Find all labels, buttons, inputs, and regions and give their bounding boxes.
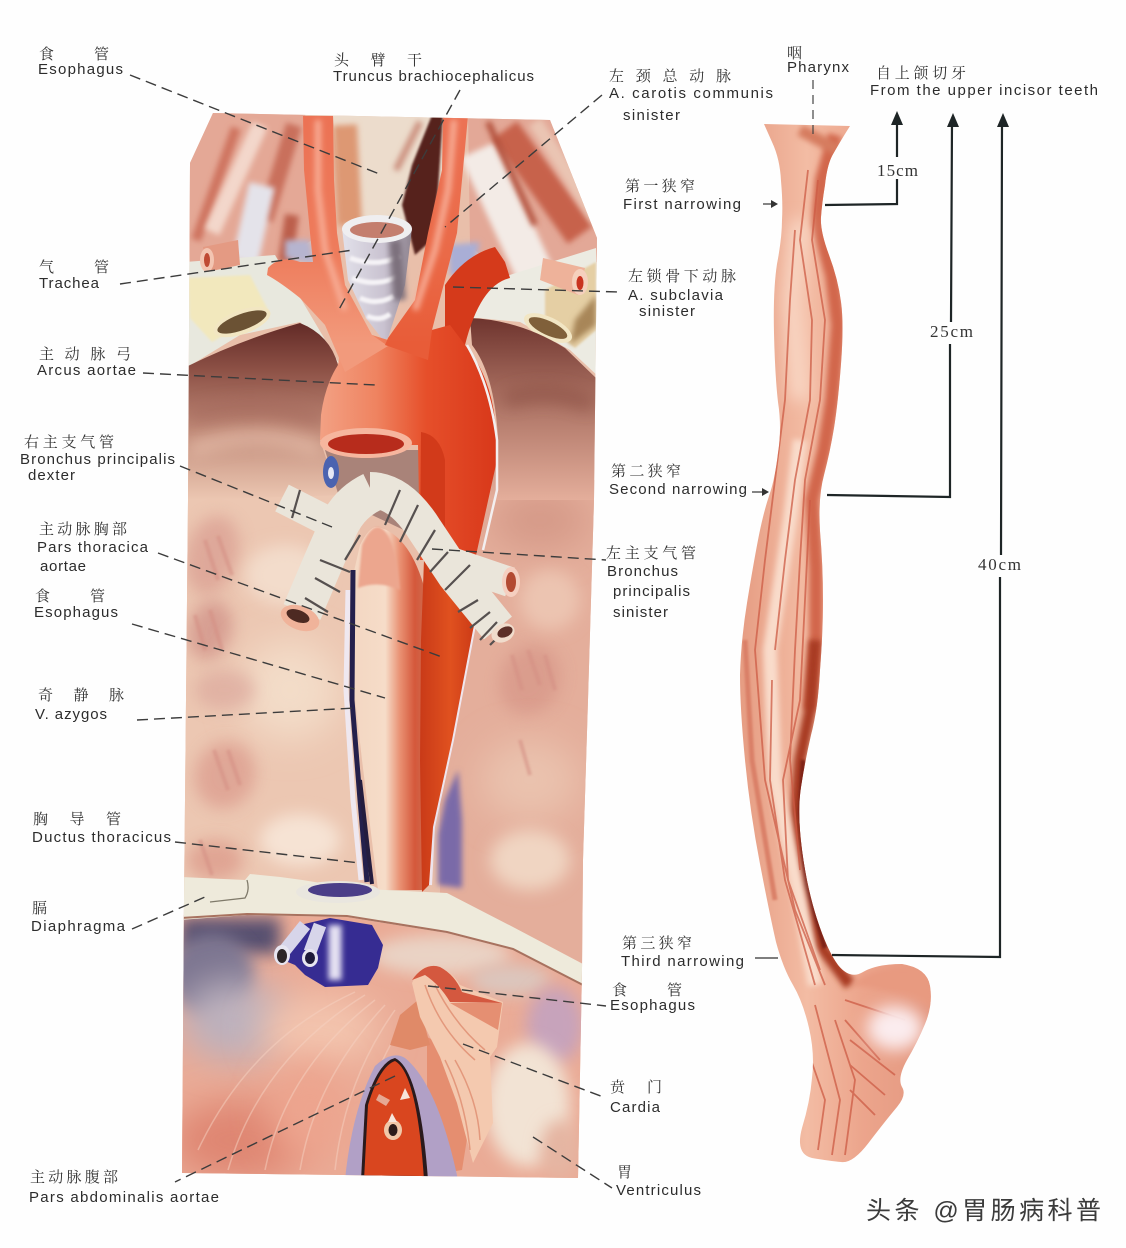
label: Cardia: Cardia (610, 1099, 661, 1116)
label: Pars thoracica aortae: 主动脉胸部 (39, 518, 127, 539)
label: Trachea (39, 256, 109, 292)
label: Ventriculus: 胃 (617, 1161, 632, 1182)
purple recess (438, 770, 462, 888)
label: A. subclavia sinister: A. subclavia (628, 287, 724, 304)
left bronchus lower end (492, 623, 514, 643)
label: Bronchus principalis sinister: sinister (613, 604, 668, 621)
clavicle stumps (188, 262, 596, 349)
lower abdomen base (170, 915, 585, 1185)
lung fields (186, 318, 596, 500)
label: V. azygos (35, 684, 124, 723)
label: Bronchus principalis sinister: principalis (613, 583, 690, 600)
left bronchus upper end (502, 567, 520, 597)
arch descending fold (420, 432, 445, 527)
arch opening (320, 428, 412, 458)
label: Pars abdominalis aortae: Pars abdominalis aortae (29, 1189, 219, 1206)
subclavian stumps (200, 240, 588, 295)
aortic arch (320, 325, 497, 560)
lower thorax pleura (177, 480, 600, 980)
label: Ductus thoracicus: 胸 导 管 (33, 808, 121, 829)
pleural reflection line (430, 345, 497, 885)
bracket: 15cm (825, 111, 918, 205)
esophageal hiatus ring (308, 881, 379, 897)
label: Ductus thoracicus: Ductus thoracicus (32, 829, 171, 846)
bronchi (277, 490, 520, 646)
label: Second narrowing: Second narrowing (609, 481, 747, 498)
label: Bronchus principalis dexter: Bronchus principalis (20, 451, 175, 468)
label: First narrowing: First narrowing (623, 196, 741, 213)
label: First narrowing (623, 175, 741, 213)
label: Esophagus top: 食 管 (39, 43, 109, 64)
label: Pars abdominalis aortae (29, 1166, 219, 1206)
label: Ventriculus: Ventriculus (616, 1182, 701, 1199)
label: V. azygos: 奇 静 脉 (38, 684, 124, 705)
label: Bronchus principalis sinister: Bronchus (607, 563, 678, 580)
label: Diaphragma: Diaphragma (31, 918, 126, 935)
label: Esophagus lower: 食 管 (612, 979, 682, 1000)
thoracic esophagus (352, 527, 425, 890)
label: Third narrowing: Third narrowing (621, 953, 744, 970)
label: Arcus aortae: 主 动 脉 弓 (39, 343, 131, 364)
label: Arcus aortae: Arcus aortae (37, 362, 136, 379)
label: From the upper incisor teeth: 自上颌切牙 (876, 62, 966, 83)
pale fascia behind clavicles (186, 240, 600, 378)
bracket: 25cm: 25cm (930, 322, 973, 341)
trachea (342, 215, 412, 340)
label: Esophagus lower: Esophagus (610, 997, 695, 1014)
narrowing pointer: first (763, 200, 778, 208)
label: Third narrowing: 第三狭窄 (622, 932, 692, 953)
leader lines: left illustration (120, 75, 618, 1188)
label: Truncus brachiocephalicus (333, 49, 534, 85)
watermark: 头条 @胃肠病科普 (866, 1197, 1101, 1225)
label: Esophagus top (38, 43, 123, 78)
label: Third narrowing (621, 932, 744, 970)
label: From the upper incisor teeth: From the upper incisor teeth (870, 82, 1098, 99)
label: Arcus aortae (37, 343, 136, 379)
label: First narrowing: 第一狭窄 (625, 175, 695, 196)
label: Second narrowing: 第二狭窄 (611, 460, 681, 481)
diaphragm band (180, 874, 585, 986)
label: Cardia (610, 1076, 662, 1116)
bracket: 40cm: 40cm (978, 555, 1021, 574)
label: Truncus brachiocephalicus: Truncus brachiocephalicus (333, 68, 534, 85)
label: Truncus brachiocephalicus: 头 臂 干 (334, 49, 422, 70)
label: Ductus thoracicus (32, 808, 171, 846)
label: Esophagus middle (34, 585, 118, 621)
label: A. subclavia sinister: sinister (639, 303, 695, 320)
label: Esophagus top: Esophagus (38, 61, 123, 78)
label: A. carotis communis sinister: sinister (623, 107, 680, 124)
cervical esophagus (333, 115, 445, 255)
label: Pars thoracica aortae (37, 518, 149, 575)
label: Cardia: 贲 门 (610, 1076, 662, 1097)
inferior vena cava (274, 918, 383, 987)
label: Trachea: Trachea (39, 275, 100, 292)
azygos vein stub (323, 456, 339, 488)
stomach fundus (850, 967, 935, 1010)
label: From the upper incisor teeth (870, 62, 1098, 99)
panel: thoracic dissection illustration (170, 108, 600, 1185)
esophagus shading and muscle streaks (745, 130, 935, 1155)
narrowing pointer: third (755, 957, 778, 959)
label: Esophagus middle: 食 管 (35, 585, 105, 606)
label: Bronchus principalis sinister (606, 542, 696, 621)
label: Esophagus lower (610, 979, 695, 1014)
esophagus body (735, 120, 940, 1170)
esophagus specimen (735, 120, 940, 1170)
label: A. subclavia sinister: 左锁骨下动脉 (628, 265, 736, 286)
label: Trachea: 气 管 (39, 256, 109, 277)
label: Diaphragma (31, 897, 126, 935)
abdominal aorta (345, 1055, 458, 1180)
label: Pharynx: 咽 (787, 42, 802, 63)
right bronchus end (280, 604, 320, 632)
mediastinal tissue under arch (325, 450, 419, 530)
neck muscles (186, 108, 600, 285)
label: Bronchus principalis dexter (20, 431, 175, 484)
bracket: 40cm (832, 113, 1021, 957)
label: A. carotis communis sinister: A. carotis communis (609, 85, 773, 102)
label: A. carotis communis sinister (609, 65, 773, 124)
thoracic aorta (420, 560, 478, 892)
label: Pars thoracica aortae: Pars thoracica (37, 539, 149, 556)
esophagus upper pink zone (358, 527, 400, 590)
label: Bronchus principalis sinister: 左主支气管 (606, 542, 696, 563)
bracket: 15cm: 15cm (877, 161, 918, 180)
label: Pars thoracica aortae: aortae (40, 558, 86, 575)
label: Diaphragma: 膈 (32, 897, 47, 918)
stomach pale highlight (867, 1006, 923, 1050)
label: Pharynx: Pharynx (787, 59, 850, 76)
label: Esophagus middle: Esophagus (34, 604, 118, 621)
label: A. carotis communis sinister: 左 颈 总 动 脉 (609, 65, 731, 86)
panel base (180, 110, 600, 1185)
label: A. subclavia sinister (628, 265, 736, 320)
label: Ventriculus (616, 1161, 701, 1199)
narrowing pointer: second (752, 488, 769, 496)
label: V. azygos: V. azygos (35, 706, 107, 723)
label: Pharynx (787, 42, 850, 76)
label: Bronchus principalis dexter: 右主支气管 (24, 431, 114, 452)
label: Second narrowing (609, 460, 747, 498)
cardia (390, 966, 503, 1175)
bracket: 25cm (827, 113, 973, 497)
azygos vein and thoracic duct (346, 570, 372, 884)
great arteries (267, 116, 468, 372)
label: Bronchus principalis dexter: dexter (28, 467, 75, 484)
muscle fan lines (198, 992, 405, 1170)
label: Pars abdominalis aortae: 主动脉腹部 (30, 1166, 118, 1187)
pharynx dashed line (812, 80, 814, 138)
left subclavian artery (445, 247, 510, 345)
